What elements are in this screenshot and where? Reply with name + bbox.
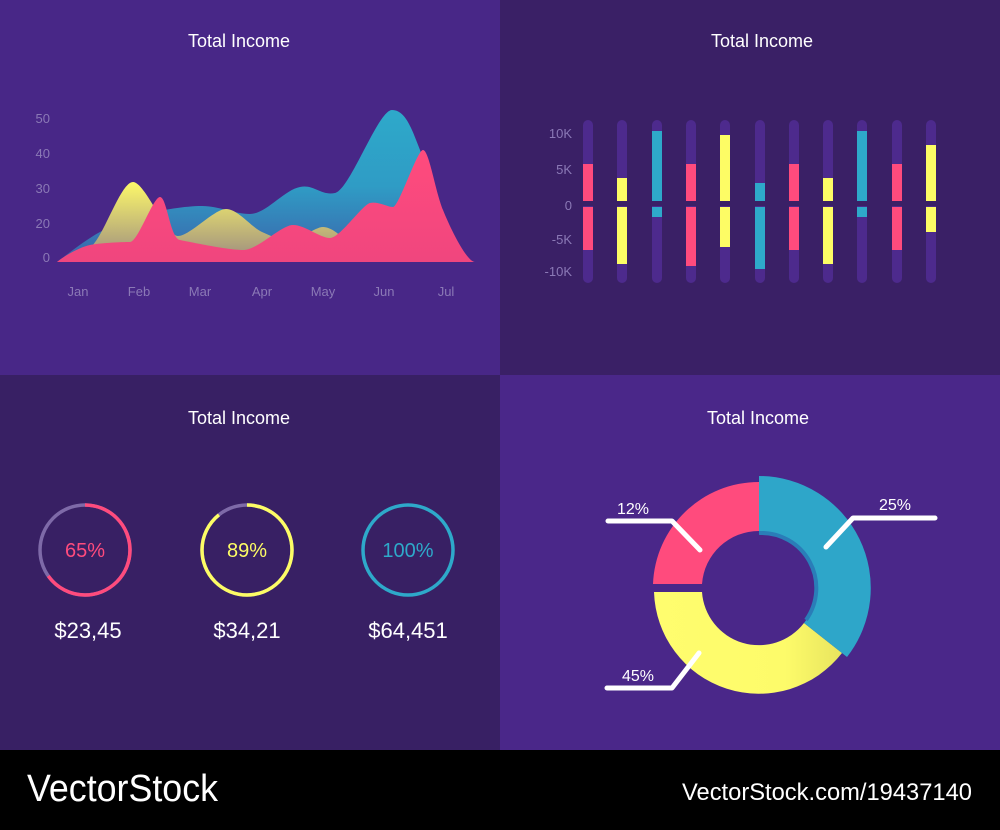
panel: progress rings [0, 375, 500, 750]
ring: 100%: $64,451 [368, 618, 448, 643]
bar y axis labels: 0 [565, 198, 572, 213]
x axis labels: Mar [189, 284, 212, 299]
callout: 45%: 45% [622, 668, 654, 685]
callout: 12% [608, 501, 700, 550]
panel: donut chart [500, 375, 1000, 750]
x axis labels: Jan [68, 284, 88, 299]
callout: 12%: 12% [617, 501, 649, 518]
donut segment: teal 25% [759, 476, 871, 657]
bar y axis labels: 10K [549, 126, 572, 141]
ring: 89% [202, 505, 292, 643]
y axis labels: 0 [43, 250, 50, 265]
ring: 89%: 89% [227, 540, 267, 562]
footer: url: VectorStock.com/19437140 [682, 779, 972, 806]
footer: brand: VectorStock [27, 768, 219, 810]
heading: area chart: Total Income [188, 31, 290, 51]
bar y axis labels: -5K [552, 232, 572, 247]
donut segment: yellow 45% [654, 592, 842, 694]
x axis labels: Feb [128, 284, 150, 299]
heading: progress rings: Total Income [188, 408, 290, 428]
area: teal series [57, 110, 440, 262]
heading: bar chart: Total Income [711, 31, 813, 51]
donut segment: pink 12% [653, 482, 759, 584]
y axis labels [36, 111, 50, 265]
panel: bar chart [500, 0, 1000, 375]
x axis labels: Jul [438, 284, 454, 299]
ring: 100% [363, 505, 453, 643]
heading: donut chart: Total Income [707, 408, 809, 428]
y axis labels: 30 [36, 181, 50, 196]
bars [583, 131, 936, 269]
x axis labels: Jun [374, 284, 394, 299]
area: pink series [57, 150, 475, 262]
callout: 25% [826, 497, 935, 547]
y axis labels: 20 [36, 216, 50, 231]
callout: 25%: 25% [879, 497, 911, 514]
footer bar [0, 750, 1000, 830]
ring: 65%: 65% [65, 540, 105, 562]
panel: area chart [0, 0, 500, 375]
ring: 100%: 100% [382, 540, 434, 562]
y axis labels: 50 [36, 111, 50, 126]
area: yellow series [57, 182, 345, 262]
bar tracks [583, 120, 936, 283]
ring: 65%: $23,45 [54, 618, 122, 643]
x axis labels: May [311, 284, 336, 299]
x axis labels [68, 284, 454, 299]
ring: 65% [40, 505, 130, 643]
bar y axis labels: -10K [545, 264, 572, 279]
bar y axis labels: 5K [556, 162, 572, 177]
x axis labels: Apr [252, 284, 273, 299]
ring: 89%: $34,21 [213, 618, 281, 643]
callout: 45% [607, 653, 699, 688]
bar y axis labels [545, 126, 572, 279]
y axis labels: 40 [36, 146, 50, 161]
